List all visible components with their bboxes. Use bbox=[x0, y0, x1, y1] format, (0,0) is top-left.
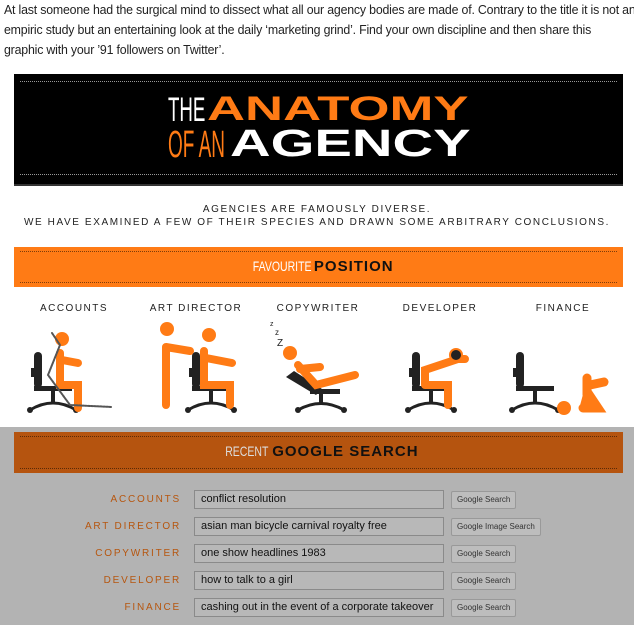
title text: OF AN bbox=[168, 124, 225, 166]
intro text: empiric study but an entertaining look at the daily ‘marketing grind’. Find your own discipline and then share this bbox=[4, 22, 591, 37]
text: one show headlines 1983 bbox=[201, 547, 326, 559]
zzz bbox=[270, 321, 283, 349]
text: conflict resolution bbox=[201, 493, 286, 505]
banner: google search: GOOGLE SEARCH bbox=[272, 443, 419, 460]
text: DEVELOPER bbox=[403, 303, 477, 314]
text: COPYWRITER bbox=[277, 303, 359, 314]
text: ART DIRECTOR bbox=[85, 521, 181, 532]
subtitle: AGENCIES ARE FAMOUSLY DIVERSE. bbox=[203, 204, 431, 215]
subtitle: WE HAVE EXAMINED A FEW OF THEIR SPECIES AND DRAWN SOME ARBITRARY CONCLUSIONS. bbox=[24, 217, 610, 228]
text: Google Search bbox=[457, 549, 510, 558]
zzz: z bbox=[275, 328, 279, 337]
title text bbox=[168, 90, 471, 166]
text: DEVELOPER bbox=[104, 575, 181, 586]
developer bbox=[425, 348, 465, 405]
copywriter bbox=[283, 346, 355, 385]
role labels: ACCOUNTS bbox=[40, 303, 108, 314]
intro text: graphic with your ’91 followers on Twitter’. bbox=[4, 42, 224, 57]
text: asian man bicycle carnival royalty free bbox=[201, 520, 387, 532]
text: Google Image Search bbox=[457, 522, 535, 531]
text: Google Search bbox=[457, 603, 510, 612]
finance bbox=[557, 378, 604, 415]
title text: ANATOMY bbox=[207, 90, 469, 128]
text: FINANCE bbox=[536, 303, 590, 314]
chairs bbox=[27, 352, 561, 413]
zzz: z bbox=[270, 321, 274, 328]
title text: THE bbox=[168, 91, 205, 129]
banner: google search: RECENT bbox=[226, 443, 269, 459]
intro text bbox=[4, 2, 634, 57]
art director bbox=[160, 322, 232, 405]
text: FINANCE bbox=[124, 602, 181, 613]
text: how to talk to a girl bbox=[201, 574, 293, 586]
search rows: ACCOUNTS bbox=[110, 494, 181, 505]
text: Google Search bbox=[457, 495, 510, 504]
text: cashing out in the event of a corporate takeover bbox=[201, 601, 433, 613]
banner: favourite position: FAVOURITE bbox=[253, 258, 312, 274]
text: Google Search bbox=[457, 576, 510, 585]
intro text: At last someone had the surgical mind to dissect what all our agency bodies are made of. Contrary to the title it is not an bbox=[4, 2, 634, 17]
title text: AGENCY bbox=[230, 123, 471, 165]
subtitle bbox=[24, 204, 610, 228]
accounts bbox=[48, 332, 112, 408]
figures bbox=[27, 321, 608, 415]
banner: favourite position bbox=[14, 247, 623, 287]
banner: favourite position: POSITION bbox=[314, 258, 394, 275]
zzz: Z bbox=[277, 338, 283, 349]
reclined chair bbox=[286, 371, 347, 413]
search section bbox=[0, 427, 634, 625]
title banner bbox=[14, 74, 623, 186]
text: COPYWRITER bbox=[95, 548, 181, 559]
text: ART DIRECTOR bbox=[150, 303, 242, 314]
banner: google search bbox=[14, 432, 623, 473]
